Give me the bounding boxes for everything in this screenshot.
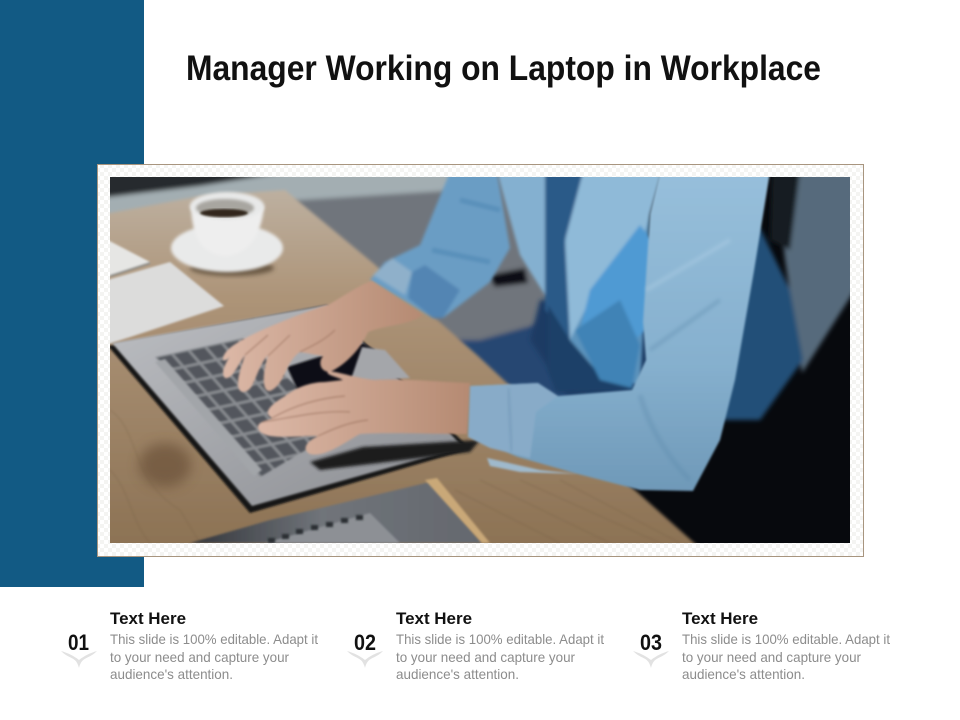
- heading 03: Text Here: [682, 609, 758, 628]
- wooden desk: [100, 190, 700, 548]
- window and wall background: [110, 177, 570, 398]
- body text 03: This slide is 100% editable. Adapt it: [682, 631, 890, 647]
- body text 01: [110, 631, 318, 682]
- blue shirt torso: [497, 172, 662, 392]
- right arm with shirt cuff: [468, 172, 770, 491]
- ornament 02: [347, 651, 383, 668]
- body text 02: to your need and capture your: [396, 649, 575, 665]
- body text 01: audience's attention.: [110, 666, 233, 682]
- ornament 01: [61, 651, 97, 668]
- body text 01: to your need and capture your: [110, 649, 289, 665]
- body text 03: to your need and capture your: [682, 649, 861, 665]
- left sidebar panel: [0, 0, 144, 587]
- body text 02: [396, 631, 604, 682]
- coffee cup and saucer: [171, 192, 283, 276]
- body text 03: audience's attention.: [682, 666, 805, 682]
- office chair: [724, 177, 850, 424]
- heading 02: Text Here: [396, 609, 472, 628]
- paper notebook on the desk: [110, 240, 224, 345]
- navy trousers and torso shadow: [530, 297, 648, 395]
- body text 03: [682, 631, 890, 682]
- photo frame: [98, 164, 864, 556]
- number 03: 03: [640, 630, 662, 655]
- item 01: [61, 609, 318, 682]
- item 02: [347, 609, 604, 682]
- body text 02: This slide is 100% editable. Adapt it: [396, 631, 604, 647]
- laptop: [108, 305, 480, 513]
- heading 01: Text Here: [110, 609, 186, 628]
- title: Manager Working on Laptop in Workplace: [186, 49, 821, 88]
- number 01: 01: [68, 630, 89, 655]
- photo: manager typing on a laptop at a wooden desk: [100, 170, 860, 548]
- body text 01: This slide is 100% editable. Adapt it: [110, 631, 318, 647]
- number 02: 02: [354, 630, 376, 655]
- hands typing: [223, 281, 470, 455]
- rolled left sleeve: [370, 172, 510, 318]
- ornament 03: [633, 651, 669, 668]
- lower notebook with spiral binding: [190, 478, 490, 543]
- item 03: [633, 609, 890, 682]
- body text 02: audience's attention.: [396, 666, 519, 682]
